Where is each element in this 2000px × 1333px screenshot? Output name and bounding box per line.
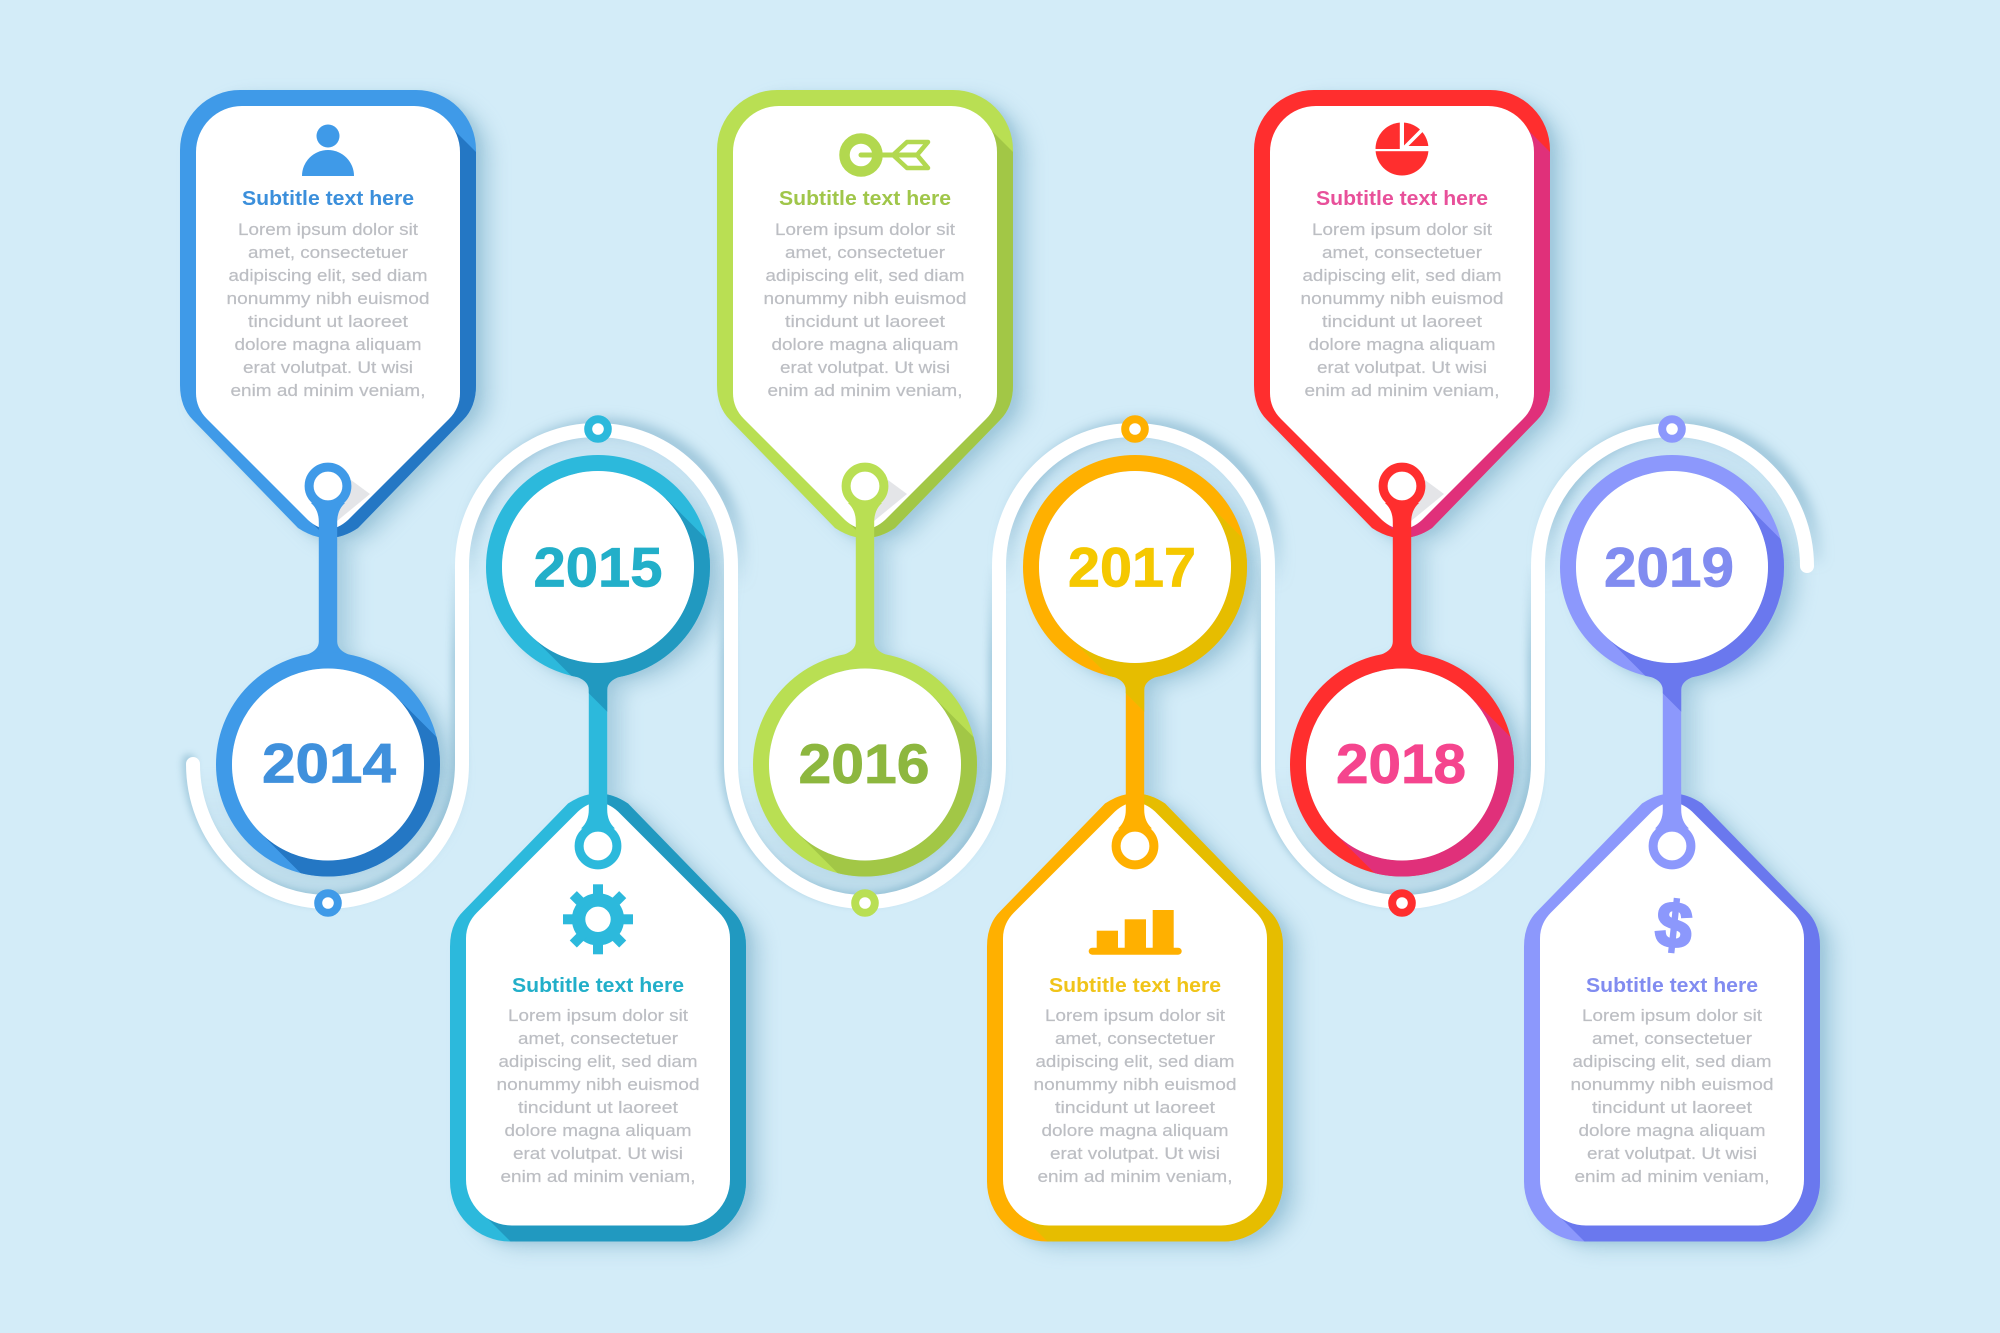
year circle 2015 [486,455,710,712]
ribbon marker [1662,419,1682,439]
body text: nonummy nibh euismod [1300,290,1504,308]
pin frame [717,90,1013,538]
body text: adipiscing elit, sed diam [498,1053,698,1071]
body text: erat volutpat. Ut wisi [243,359,413,377]
ribbon marker [855,893,875,913]
ribbon marker [588,419,608,439]
subtitle: Subtitle text here [512,975,684,997]
body text: enim ad minim veniam, [1304,382,1500,400]
tag frame [987,794,1283,1242]
body text: tincidunt ut laoreet [785,313,945,331]
panel: 2016 [717,90,1013,913]
body text: tincidunt ut laoreet [248,313,408,331]
body text: erat volutpat. Ut wisi [513,1145,683,1163]
body text: tincidunt ut laoreet [1322,313,1482,331]
body text: nonummy nibh euismod [763,290,967,308]
body text: dolore magna aliquam [772,336,958,354]
body text: erat volutpat. Ut wisi [1317,359,1487,377]
connector stem and eyelet [1380,467,1424,655]
body text [226,221,430,400]
icon: bar chart [1089,910,1182,955]
body text: enim ad minim veniam, [1574,1168,1770,1186]
body text: enim ad minim veniam, [1038,1168,1232,1186]
year circle 2016: 2016 [798,732,930,795]
icon: gear [563,884,633,954]
year circle 2015: 2015 [534,536,662,598]
panel: 2019 [1524,419,1820,1242]
body text: Lorem ipsum dolor sit [775,221,955,239]
connector stem and eyelet [1650,676,1694,865]
body text: nonummy nibh euismod [1033,1076,1237,1094]
body text: nonummy nibh euismod [226,290,430,308]
ribbon shadows, downward bends [193,566,1538,902]
tag frame [1524,794,1820,1242]
connector stem and eyelet [576,676,620,865]
body text: amet, consectetuer [785,244,946,262]
body text: Lorem ipsum dolor sit [1045,1007,1225,1025]
body text: amet, consectetuer [518,1030,679,1048]
subtitle: Subtitle text here [242,188,414,210]
ribbon marker [318,893,338,913]
body text [496,1007,700,1186]
body text: amet, consectetuer [1055,1030,1216,1048]
year circle 2018: 2018 [1336,732,1466,795]
subtitle: Subtitle text here [779,188,951,210]
connector stem and eyelet [306,467,350,655]
soft drop shadows of all panels [180,90,1820,1242]
body text: amet, consectetuer [248,244,409,262]
year circle 2014: 2014 [262,732,396,794]
body text: adipiscing elit, sed diam [1302,267,1502,285]
icon: person [302,124,354,176]
body text: enim ad minim veniam, [500,1168,696,1186]
body text: tincidunt ut laoreet [1592,1099,1752,1117]
white winding timeline ribbon [193,430,1807,902]
icon: dollar sign: $ [1653,887,1695,963]
body text: dolore magna aliquam [504,1122,692,1140]
body text [1570,1007,1774,1186]
body text: tincidunt ut laoreet [1055,1099,1215,1117]
body text: adipiscing elit, sed diam [766,267,964,285]
subtitle: Subtitle text here [1586,975,1758,997]
body text: dolore magna aliquam [1308,336,1496,354]
body text: erat volutpat. Ut wisi [780,359,950,377]
subtitle: Subtitle text here [1316,188,1488,210]
body text: adipiscing elit, sed diam [1036,1053,1234,1071]
body text [1300,221,1504,400]
year circle 2017: 2017 [1068,536,1196,598]
body text: Lorem ipsum dolor sit [1312,221,1492,239]
body text: enim ad minim veniam, [230,382,426,400]
ribbon shadows, upward bends [462,430,1807,600]
icon: target arrow [844,138,928,172]
connector stem and eyelet [1113,676,1157,865]
year circle 2018 [1298,660,1506,868]
body text: nonummy nibh euismod [496,1076,700,1094]
body text: Lorem ipsum dolor sit [508,1007,688,1025]
year circle 2017 [1023,455,1247,712]
year circle 2019: 2019 [1604,536,1734,598]
body text: adipiscing elit, sed diam [228,267,428,285]
panel: 2015 [450,419,746,1242]
ribbon marker [1392,893,1412,913]
subtitle: Subtitle text here [1049,975,1221,997]
panel: 2017 [987,419,1283,1242]
body text: adipiscing elit, sed diam [1572,1053,1772,1071]
tag frame [450,794,746,1242]
body text: dolore magna aliquam [234,336,422,354]
year circle 2019 [1560,455,1784,712]
body text: erat volutpat. Ut wisi [1050,1145,1220,1163]
body text: nonummy nibh euismod [1570,1076,1774,1094]
body text: Lorem ipsum dolor sit [238,221,418,239]
body text: Lorem ipsum dolor sit [1582,1007,1762,1025]
year circle 2014 [224,660,432,868]
inner shade bands under the ribbon [209,445,1791,887]
body text: amet, consectetuer [1592,1030,1753,1048]
icon: pie chart [1372,120,1432,176]
body text: amet, consectetuer [1322,244,1483,262]
pin frame [1254,90,1550,538]
ribbon marker [1125,419,1145,439]
body text: dolore magna aliquam [1578,1122,1766,1140]
body text [1034,1007,1236,1186]
connector stem and eyelet [843,467,887,655]
body text: tincidunt ut laoreet [518,1099,678,1117]
body text [764,221,966,400]
body text: erat volutpat. Ut wisi [1587,1145,1757,1163]
panel: 2018 [1254,90,1550,913]
body text: enim ad minim veniam, [768,382,962,400]
year circle 2016 [761,660,969,868]
body text: dolore magna aliquam [1042,1122,1228,1140]
pin frame [180,90,476,538]
panel: 2014 [180,90,476,913]
